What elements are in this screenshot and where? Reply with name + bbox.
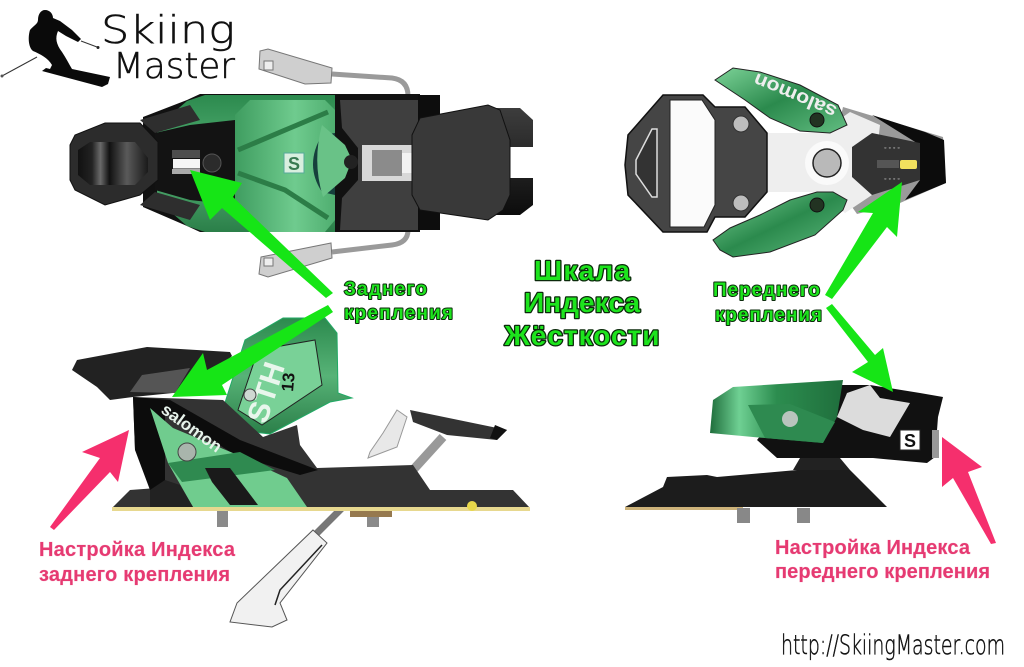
silver panel — [837, 385, 910, 437]
white body — [766, 112, 880, 213]
rear binding, top view: S — [288, 154, 300, 174]
arrow: green to rear top window — [190, 170, 333, 298]
front binding, side view — [625, 380, 943, 523]
front binding, top view — [625, 68, 946, 257]
arrow: green to rear side — [172, 305, 333, 397]
title — [504, 255, 660, 351]
brake pedal arm — [368, 410, 507, 470]
head grey — [840, 107, 946, 214]
DIN scale lower text: ◦ ◦ ◦ ◦ — [884, 176, 900, 183]
S badge: S — [904, 431, 916, 451]
heel lower block — [150, 480, 193, 507]
rear binding, top view — [70, 49, 533, 277]
screw — [203, 154, 221, 172]
green housing — [710, 380, 843, 443]
label: front binding: крепления — [715, 305, 822, 326]
mount screws 2 — [797, 508, 810, 523]
title: Шкала — [534, 255, 630, 286]
clasp mechanism — [362, 145, 416, 181]
column — [793, 458, 850, 470]
arrow: green to front side — [826, 304, 893, 392]
yellow indicator — [900, 160, 917, 169]
title: Жёсткости — [504, 320, 660, 351]
heel cup — [70, 123, 158, 205]
centre ball — [805, 141, 849, 185]
label: rear binding: крепления — [344, 303, 453, 324]
screw — [733, 116, 749, 132]
label: rear DIN adjustment: Настройка Индекса — [39, 539, 236, 561]
icon: skier silhouette — [0, 10, 110, 87]
label: rear DIN adjustment — [39, 539, 236, 586]
label: rear DIN adjustment: заднего крепления — [39, 564, 230, 586]
rear binding, side view — [72, 318, 530, 627]
logo word: Skiing: Skiing — [101, 8, 235, 52]
central grey plate — [340, 100, 418, 230]
logo: Skiing Master — [0, 8, 235, 87]
heel wings grey — [140, 105, 200, 220]
wing text: salomon — [751, 68, 840, 122]
yellow dot — [467, 501, 477, 511]
green S panel — [235, 100, 335, 232]
brake slot — [205, 468, 258, 505]
black outer — [143, 94, 440, 232]
screw — [782, 411, 798, 427]
cable body — [155, 120, 235, 205]
title: Индекса — [524, 287, 640, 318]
dark arc — [313, 133, 335, 195]
label: rear binding: Заднего — [344, 279, 427, 300]
black stripe — [133, 397, 318, 490]
green side panel — [150, 408, 307, 507]
toe end — [932, 430, 939, 458]
label: front DIN adjustment: переднего крепления — [775, 561, 990, 583]
AFD pad — [412, 105, 510, 220]
black end block — [418, 95, 440, 230]
badge — [636, 129, 657, 197]
yellow base strip — [112, 507, 530, 511]
green inset — [748, 404, 835, 443]
DIN window — [172, 150, 200, 174]
green upper — [222, 318, 352, 434]
dark body — [112, 397, 530, 508]
label: front binding: Переднего — [713, 280, 820, 301]
screw — [178, 443, 196, 461]
label: front DIN adjustment — [775, 537, 990, 583]
rear ears — [485, 108, 533, 215]
screw — [810, 113, 824, 127]
mounting screw — [217, 511, 228, 527]
green wing top — [715, 68, 847, 133]
arrow: pink front — [942, 437, 996, 544]
brake arms — [259, 49, 408, 277]
green housing — [157, 95, 335, 232]
label: front binding — [713, 280, 822, 326]
green nose — [317, 125, 352, 197]
mounting plate — [350, 511, 392, 517]
label: rear binding — [344, 279, 453, 324]
DIN dial — [852, 133, 920, 195]
arrow: pink rear — [50, 430, 129, 530]
white window — [670, 100, 715, 227]
salomon text: salomon — [158, 400, 225, 456]
logo word: Master: Master — [113, 46, 235, 87]
model text: STH — [241, 358, 292, 427]
mount screws — [737, 508, 750, 523]
label: front DIN adjustment: Настройка Индекса — [775, 537, 971, 559]
toe housing dark — [757, 385, 943, 463]
screw — [733, 195, 749, 211]
logo badge S — [284, 153, 304, 173]
S badge — [900, 430, 920, 451]
base rear — [625, 95, 767, 232]
base — [625, 470, 887, 507]
DIN scale text: ◦ ◦ ◦ ◦ — [884, 145, 900, 152]
heel cup — [72, 347, 232, 400]
arrow: green to front top — [825, 182, 902, 299]
side screw — [244, 389, 256, 401]
model number: 13 — [278, 372, 299, 392]
screw — [810, 198, 824, 212]
mounting screw 2 — [367, 517, 379, 527]
brake lower arm — [230, 482, 398, 627]
green wing bottom — [713, 192, 847, 257]
